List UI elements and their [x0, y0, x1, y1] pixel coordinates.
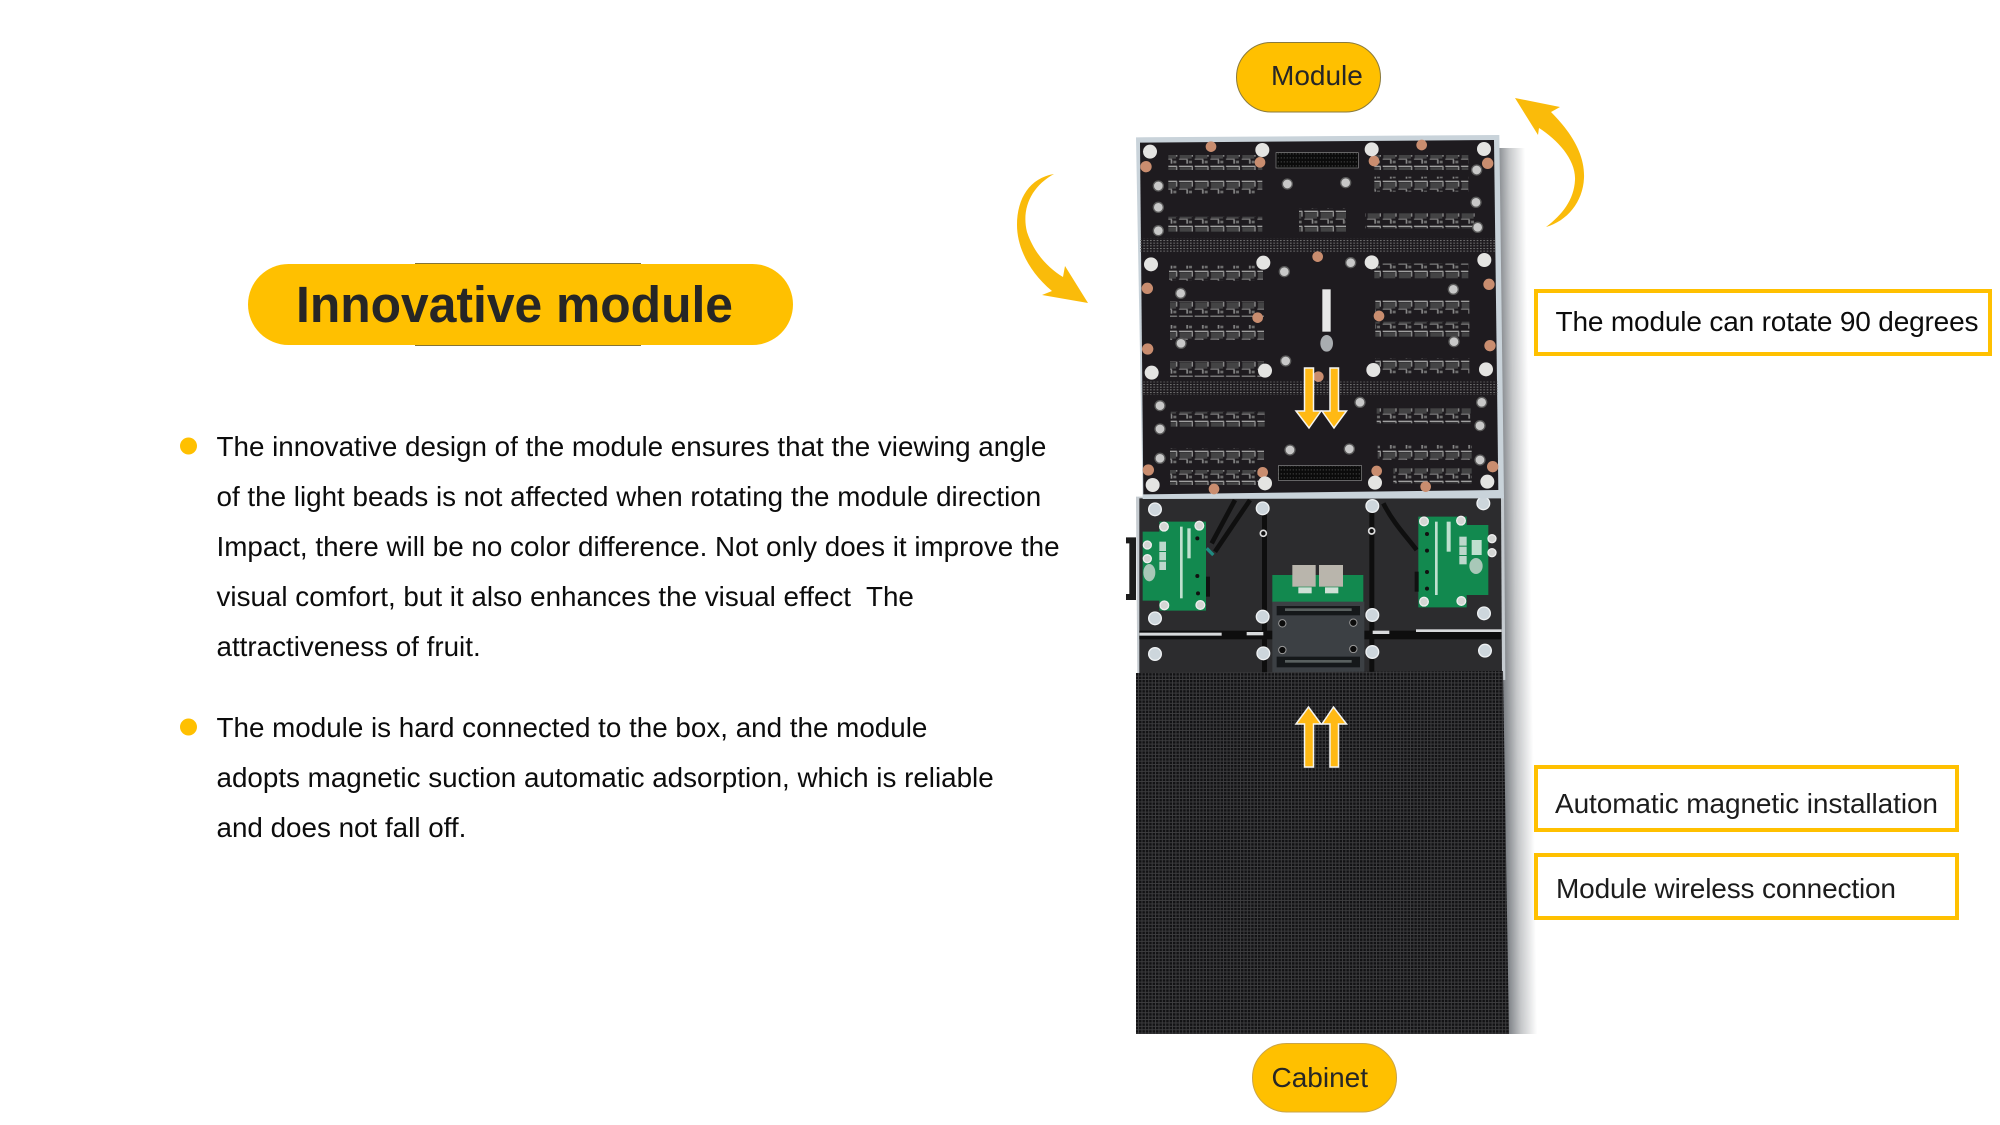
- paragraph two: The module is hard connected to the box, and the module: [216, 712, 927, 743]
- LED display panel: [1136, 671, 1509, 1034]
- arrow: rotate counter-clockwise left: [1017, 174, 1088, 303]
- paragraph one: Impact, there will be no color difference. Not only does it improve the: [216, 531, 1060, 562]
- label: Cabinet: Cabinet: [1272, 1062, 1368, 1093]
- callout: rotation: The module can rotate 90 degrees: [1556, 306, 1978, 337]
- ribbon connectors: [1276, 153, 1362, 480]
- dotted trace bands: [1140, 238, 1498, 395]
- paragraph two: and does not fall off.: [216, 812, 466, 843]
- title text: Innovative module: [296, 276, 733, 333]
- small standoffs: [1153, 165, 1487, 465]
- rear of display module: [1136, 135, 1504, 499]
- bullet list: rotation benefit: [180, 431, 1060, 662]
- bullet dot one: [180, 438, 197, 454]
- label: Module: Module: [1271, 60, 1363, 91]
- rail highlights: [1139, 629, 1502, 636]
- callout: magnetic installation: Automatic magnetic installation: [1555, 788, 1938, 819]
- left power board: [1143, 521, 1210, 611]
- cabinet shadow: [1490, 148, 1542, 1034]
- paragraph two: [216, 712, 994, 843]
- bullet dot two: [180, 718, 197, 736]
- driver chip rows: [1168, 155, 1475, 485]
- callout: wireless connection: [1536, 855, 1957, 918]
- bullet list: magnetic connection: [180, 712, 994, 843]
- title pill: [248, 263, 793, 346]
- label: Cabinet: [1252, 1044, 1396, 1112]
- frame bars: [1139, 508, 1501, 673]
- down arrows: module insertion: [1296, 368, 1346, 428]
- serial label and logo: [1320, 289, 1333, 352]
- cabinet fasteners: [1149, 497, 1491, 660]
- up arrows: cabinet insertion: [1296, 707, 1346, 767]
- cabinet handle: [1126, 537, 1136, 600]
- center connector board: [1272, 565, 1364, 673]
- arrow: rotate counter-clockwise top right: [1515, 98, 1584, 227]
- paragraph one: [216, 431, 1060, 662]
- callout: magnetic installation: [1536, 767, 1957, 830]
- callout: rotation: [1536, 291, 1990, 354]
- paragraph one: of the light beads is not affected when rotating the module direction: [216, 481, 1041, 512]
- power cables: [1212, 500, 1417, 552]
- label: Module: [1236, 42, 1380, 112]
- callout: wireless connection: Module wireless connection: [1556, 873, 1896, 904]
- paragraph one: visual comfort, but it also enhances the visual effect The: [216, 581, 914, 612]
- paragraph one: The innovative design of the module ensures that the viewing angle: [216, 431, 1046, 462]
- cabinet interior: [1126, 495, 1505, 680]
- copper pads: [1140, 140, 1498, 494]
- right power board: [1415, 516, 1496, 607]
- mounting magnets: [1143, 142, 1494, 492]
- paragraph two: adopts magnetic suction automatic adsorption, which is reliable: [216, 762, 994, 793]
- product photo: module above cabinet: [1126, 135, 1542, 1034]
- paragraph one: attractiveness of fruit.: [216, 631, 481, 662]
